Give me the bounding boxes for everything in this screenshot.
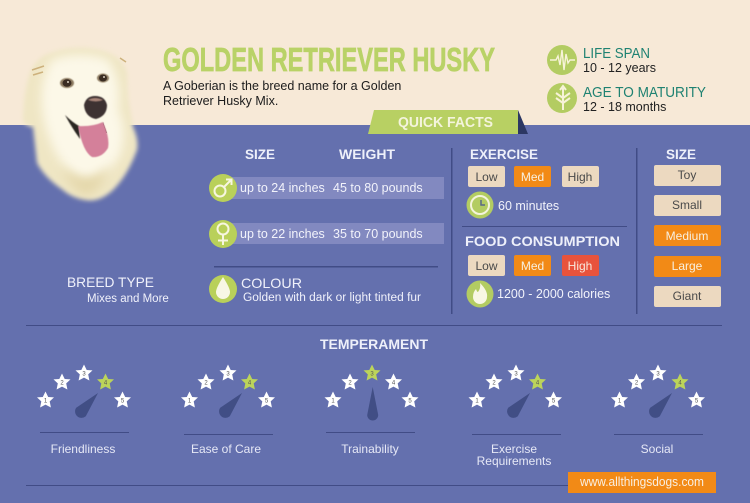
- gauge: ease of care: [181, 364, 275, 456]
- exercise levels: High: [568, 170, 592, 184]
- gauge: ease of care: Ease of Care: [191, 442, 261, 456]
- gauge: social: Social: [641, 442, 673, 456]
- gauge: ease of care: 4: [248, 380, 252, 386]
- breed type: [67, 275, 169, 305]
- gauge: exercise requirements: Requirements: [477, 454, 551, 468]
- male row: up to 24 inches: [240, 181, 325, 195]
- gauge: trainability: 4: [392, 380, 396, 386]
- food consumption heading: FOOD CONSUMPTION: [465, 234, 620, 249]
- gauge: exercise requirements: 2: [492, 380, 496, 386]
- size options: Giant: [673, 289, 702, 303]
- intro text: A Goberian is the breed name for a Golden: [163, 79, 401, 93]
- temperament heading: TEMPERAMENT: [320, 336, 428, 352]
- gauge: friendliness: 3: [82, 372, 86, 378]
- life span heading: LIFE SPAN: [583, 45, 650, 62]
- gauge: trainability: 1: [331, 398, 335, 404]
- gauge: trainability: [324, 364, 418, 456]
- icon: dog photo: [23, 48, 138, 200]
- gauge: trainability: Trainability: [341, 442, 399, 456]
- female row: up to 22 inches: [240, 227, 325, 241]
- size heading: SIZE: [245, 147, 275, 162]
- age to maturity value: 12 - 18 months: [583, 100, 666, 114]
- gauge: ease of care: 2: [204, 380, 208, 386]
- food calories: [466, 280, 610, 308]
- colour block: COLOUR: [241, 275, 302, 291]
- exercise levels: Med: [521, 170, 544, 184]
- food levels: [468, 255, 599, 276]
- male row: 45 to 80 pounds: [333, 181, 423, 195]
- intro text: Retriever Husky Mix.: [163, 94, 278, 108]
- website badge: www.allthingsdogs.com: [579, 475, 704, 489]
- breed type: BREED TYPE: [67, 275, 154, 290]
- gauge: exercise requirements: 3: [514, 372, 518, 378]
- gauge: exercise requirements: 4: [536, 380, 540, 386]
- exercise levels: Low: [475, 170, 498, 184]
- gauge: ease of care: 5: [265, 398, 269, 404]
- gauge: social: 2: [635, 380, 639, 386]
- gauge: friendliness: 1: [44, 398, 48, 404]
- gauge: trainability: 3: [370, 372, 374, 378]
- size heading right: SIZE: [666, 147, 696, 162]
- exercise heading: EXERCISE: [470, 147, 538, 162]
- gauge: trainability: 2: [348, 380, 352, 386]
- food levels: Low: [475, 259, 498, 273]
- gauge: social: 5: [695, 398, 699, 404]
- exercise duration: 60 minutes: [498, 199, 559, 213]
- gauge: friendliness: 2: [60, 380, 64, 386]
- female row: [209, 220, 444, 248]
- gauge: friendliness: Friendliness: [51, 442, 115, 456]
- gauge: social: 1: [618, 398, 622, 404]
- gauge: social: 4: [678, 380, 682, 386]
- gauge: friendliness: 5: [121, 398, 125, 404]
- website badge: [568, 472, 716, 493]
- gauge: friendliness: [37, 364, 131, 456]
- food calories: 1200 - 2000 calories: [497, 287, 610, 301]
- gauge: exercise requirements: Exercise: [491, 442, 537, 456]
- body background: [0, 125, 750, 503]
- size options: [654, 165, 721, 307]
- icon: age to maturity: [547, 83, 577, 113]
- male row: [209, 174, 444, 202]
- gauge: social: 3: [656, 372, 660, 378]
- breed type: Mixes and More: [87, 293, 169, 305]
- quick facts ribbon: QUICK FACTS: [398, 115, 493, 131]
- life span value: 10 - 12 years: [583, 61, 656, 75]
- gauge: exercise requirements: 1: [475, 398, 479, 404]
- colour block: [209, 275, 421, 304]
- title: GOLDEN RETRIEVER HUSKY: [163, 41, 495, 78]
- gauge: ease of care: 1: [188, 398, 192, 404]
- food levels: High: [568, 259, 592, 273]
- food levels: Med: [521, 259, 544, 273]
- exercise duration: [466, 192, 559, 218]
- size options: Large: [672, 259, 703, 273]
- female row: 35 to 70 pounds: [333, 227, 423, 241]
- gauge: trainability: 5: [408, 398, 412, 404]
- exercise levels: [468, 166, 599, 187]
- weight heading: WEIGHT: [339, 147, 396, 162]
- size options: Toy: [678, 168, 696, 182]
- header background: [0, 0, 750, 125]
- icon: life span: [547, 45, 577, 75]
- size options: Small: [672, 198, 702, 212]
- gauge: ease of care: 3: [226, 372, 230, 378]
- gauge: social: [611, 364, 705, 456]
- age to maturity heading: AGE TO MATURITY: [583, 84, 706, 101]
- gauge: exercise requirements: [468, 364, 562, 468]
- quick facts ribbon: [368, 110, 528, 134]
- gauge: friendliness: 4: [104, 380, 108, 386]
- gauge: exercise requirements: 5: [552, 398, 556, 404]
- size options: Medium: [666, 229, 708, 243]
- colour block: Golden with dark or light tinted fur: [243, 292, 421, 304]
